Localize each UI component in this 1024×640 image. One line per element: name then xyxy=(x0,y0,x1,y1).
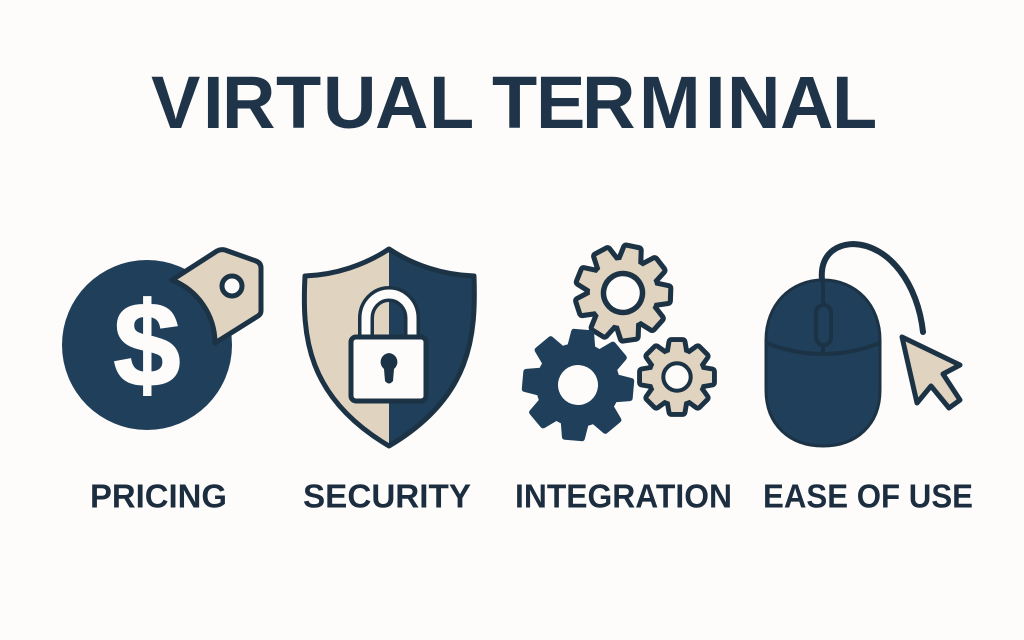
padlock body xyxy=(351,337,426,401)
coin xyxy=(62,260,232,430)
gear: top beige xyxy=(569,239,677,347)
gear: bottom dark xyxy=(521,328,635,442)
dollar sign: $ xyxy=(114,278,180,412)
shield right half xyxy=(389,250,474,446)
label: integration: INTEGRATION xyxy=(515,478,732,514)
tag hole xyxy=(222,276,242,296)
label: ease of use: EASE OF USE xyxy=(763,478,973,514)
keyhole xyxy=(381,353,397,384)
icon: ease of use mouse xyxy=(766,244,960,446)
gear: right beige xyxy=(642,342,712,412)
price tag xyxy=(172,250,261,343)
shield left half xyxy=(305,250,389,446)
icon: integration gears xyxy=(521,239,712,442)
icon: security shield xyxy=(304,249,474,446)
mouse button divider xyxy=(766,343,880,354)
label: pricing: PRICING xyxy=(90,478,227,514)
title: VIRTUAL TERMINAL xyxy=(151,61,877,144)
shield outline xyxy=(304,249,474,446)
mouse body xyxy=(766,280,880,446)
mouse cable xyxy=(822,244,923,332)
cursor arrow xyxy=(902,337,960,408)
scroll wheel xyxy=(816,305,831,345)
label: security: SECURITY xyxy=(303,478,471,514)
icon: pricing coin and tag xyxy=(62,250,261,430)
padlock shackle xyxy=(366,294,412,336)
